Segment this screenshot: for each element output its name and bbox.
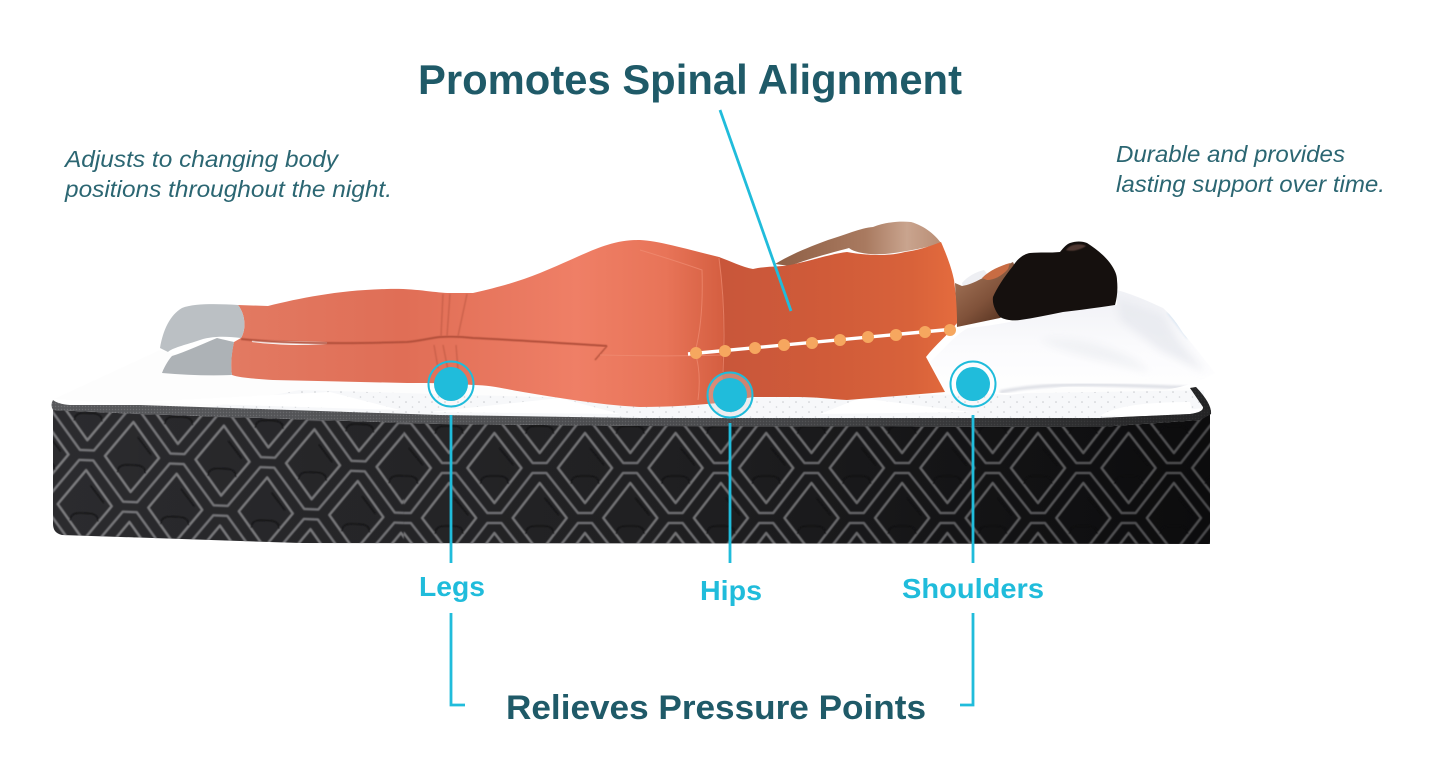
mattress border band [52, 387, 1211, 427]
pillow [962, 270, 1200, 393]
mattress top surface [54, 350, 1204, 418]
note second line: adjusts: positions throughout the night. [64, 176, 392, 202]
knee folds [434, 294, 467, 370]
gap between legs [252, 341, 327, 344]
pressure point: hips [708, 372, 752, 418]
arm and shoulder [775, 222, 941, 266]
mattress side panel [50, 405, 1215, 547]
leggings [231, 240, 728, 407]
note second line: durable: lasting support over time. [1116, 171, 1385, 197]
neck [955, 262, 1030, 327]
pressure point: shoulders [950, 362, 996, 406]
waistband seams [600, 250, 724, 400]
ear [982, 263, 1010, 280]
spine alignment line with dots [688, 324, 965, 359]
title: promotes spinal alignment: Promotes Spinal Alignment [418, 56, 962, 103]
note: adjusts to body positions: Adjusts to changing body [63, 146, 340, 172]
mattress infographic [52, 64, 1382, 720]
label: legs: Legs [419, 571, 485, 602]
label: hips: Hips [700, 575, 762, 606]
sleeveless top [719, 242, 957, 403]
woman lying on her side [160, 222, 1117, 407]
leg crease [241, 337, 607, 360]
connector lines [451, 110, 973, 705]
hair [993, 242, 1117, 320]
note: durable support: Durable and provides [1116, 141, 1346, 167]
mattress [52, 387, 1212, 544]
socks [160, 304, 244, 375]
label: shoulders: Shoulders [902, 573, 1044, 604]
heading: relieves pressure points: Relieves Pressure Points [506, 689, 926, 727]
pressure point: legs [428, 362, 474, 406]
